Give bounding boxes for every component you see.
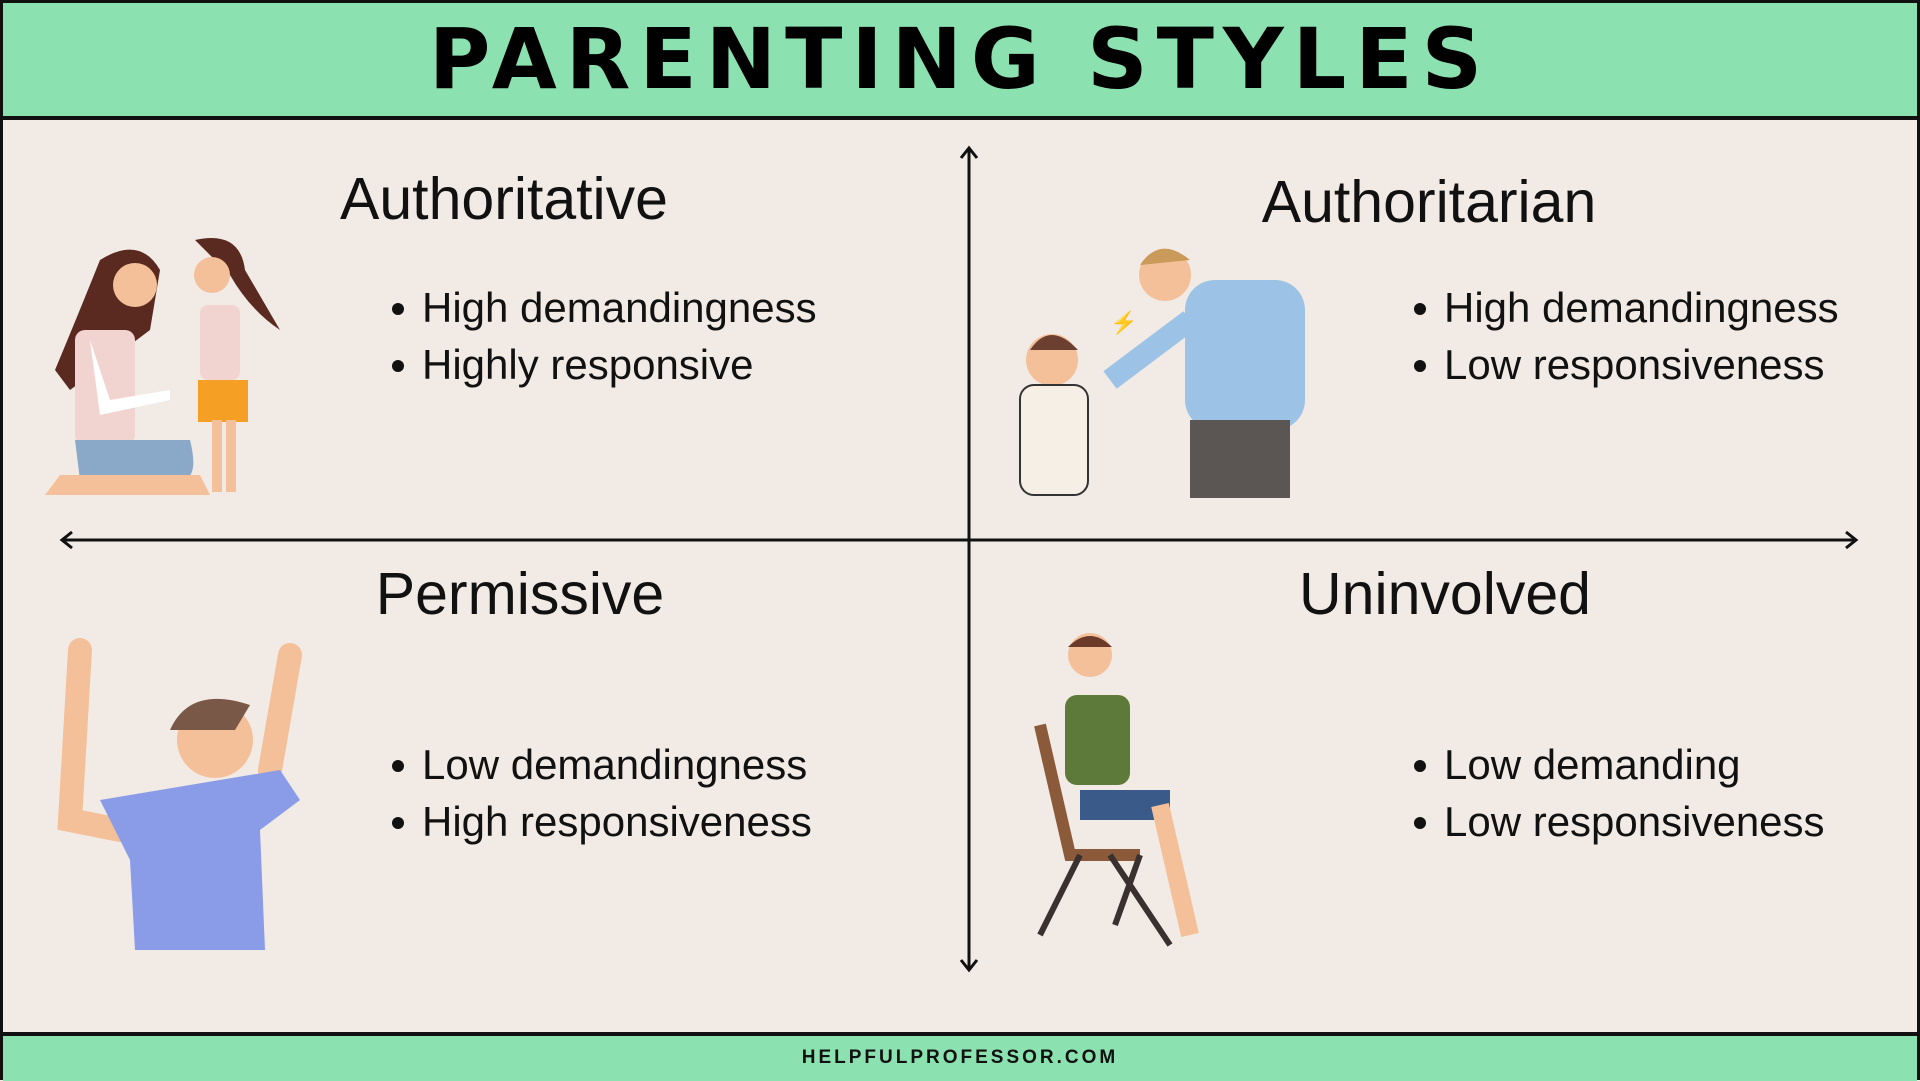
bullets: Authoritative: High demandingness (422, 284, 817, 331)
footer text: HELPFULPROFESSOR.COM (802, 1047, 1118, 1068)
bullets: Uninvolved: Low demanding (1444, 741, 1741, 788)
bullets: Uninvolved: Low responsiveness (1444, 798, 1825, 845)
bullets: Authoritative: Highly responsive (422, 341, 754, 388)
illustration: relaxed man in chair (1034, 633, 1199, 947)
illustration: permissive parent (57, 638, 302, 950)
bullets: Permissive: High responsiveness (422, 798, 812, 845)
bullets: Authoritarian: Low responsiveness (1444, 341, 1825, 388)
heading: Uninvolved: Uninvolved (1299, 561, 1591, 627)
title: PARENTING STYLES (429, 10, 1491, 108)
bullets: Authoritarian (1414, 284, 1839, 388)
bullets: Uninvolved (1414, 741, 1825, 845)
footer band (3, 1032, 1917, 1081)
bullets: Permissive (392, 741, 812, 845)
heading: Permissive: Permissive (376, 561, 664, 627)
heading: Authoritative: Authoritative (340, 166, 668, 232)
bullets: Authoritative (392, 284, 817, 388)
heading: Authoritarian: Authoritarian (1262, 169, 1596, 235)
bullets: Authoritarian: High demandingness (1444, 284, 1839, 331)
illustration: scolding parent and child: ⚡ (1110, 310, 1137, 336)
header band (3, 3, 1917, 120)
illustration: scolding parent and child (1019, 248, 1305, 498)
bullets: Permissive: Low demandingness (422, 741, 807, 788)
illustration: mother and daughter (45, 238, 280, 495)
